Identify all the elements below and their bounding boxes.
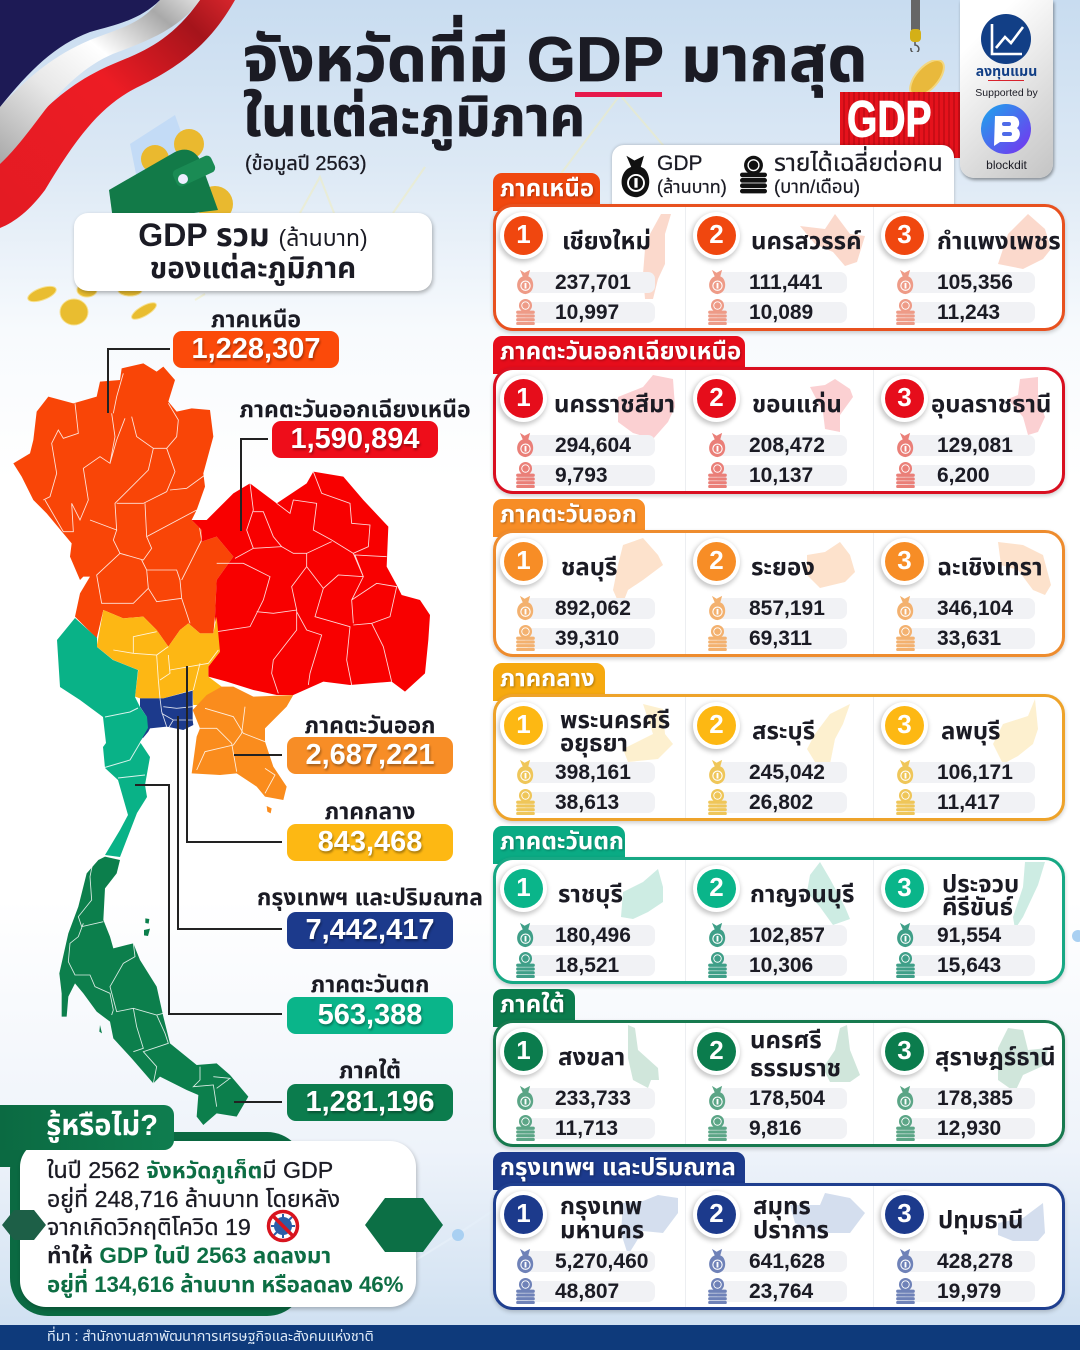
- legend income: รายได้เฉลี่ยต่อคน: [774, 150, 943, 177]
- icon: GDP container: GDP: [847, 92, 932, 148]
- central 1: 1: [516, 709, 531, 739]
- east 3: 3: [897, 545, 912, 575]
- south 3: [873, 1020, 1063, 1147]
- south 1: สงขลา: [558, 1044, 625, 1071]
- frame: [10, 1132, 305, 1316]
- connector: west: [130, 780, 284, 1018]
- icon: crane hook: [905, 0, 927, 52]
- northeast 2: 2: [709, 382, 724, 412]
- north 1: 1: [516, 219, 531, 249]
- east 1: ชลบุรี: [561, 554, 617, 581]
- supported by: Supported by: [975, 87, 1038, 99]
- connector: north: [100, 340, 175, 420]
- Bangkok 3: [873, 1183, 1063, 1310]
- south 2: ธรรมราช: [750, 1055, 841, 1082]
- did you know text: อยู่ที่ 248,716 ล้านบาท โดยหลัง: [47, 1186, 340, 1212]
- map: west region: [57, 618, 150, 857]
- map: south region: [59, 857, 248, 1125]
- Bangkok 3: 19,979: [937, 1280, 1001, 1303]
- west 2: 2: [709, 872, 724, 902]
- south 2: 2: [709, 1035, 724, 1065]
- title: [243, 20, 883, 142]
- central 2: [685, 694, 875, 821]
- label: Bangkok GDP: กรุงเทพฯ และปริมณฑล: [257, 884, 483, 910]
- central 1: อยุธยา: [560, 730, 628, 757]
- label: south GDP: [250, 1058, 490, 1120]
- did you know text: [47, 1156, 412, 1302]
- north 2: นครสวรรค์: [751, 228, 862, 255]
- icon: legend bag: [620, 154, 652, 199]
- panel: south: [493, 1020, 1065, 1147]
- icon: right hexagon: [365, 1190, 443, 1260]
- central 2: สระบุรี: [752, 718, 815, 745]
- south 2: 9,816: [749, 1117, 802, 1140]
- west 3: คีรีขันธ์: [942, 894, 1013, 921]
- Bangkok 2: 641,628: [749, 1250, 825, 1273]
- Bangkok 1: 5,270,460: [555, 1250, 648, 1273]
- northeast 1: นครราชสีมา: [554, 391, 675, 418]
- connector: central: [180, 660, 284, 846]
- tab: Bangkok: กรุงเทพฯ และปริมณฑล: [500, 1154, 736, 1181]
- panel: east: [493, 530, 1065, 657]
- northeast 1: 9,793: [555, 464, 608, 487]
- north 2: 111,441: [749, 271, 823, 294]
- label: northeast GDP: 1,590,894: [290, 423, 420, 455]
- west 3: 91,554: [937, 924, 1001, 947]
- west 1: 18,521: [555, 954, 619, 977]
- south 1: 233,733: [555, 1087, 631, 1110]
- icon: gold coin: [905, 60, 949, 96]
- label: north GDP: ภาคเหนือ: [211, 306, 301, 332]
- west 3: ประจวบ: [942, 871, 1019, 898]
- label: central GDP: ภาคกลาง: [325, 798, 415, 824]
- tab: north: [493, 173, 600, 211]
- northeast 3: 6,200: [937, 464, 990, 487]
- central 2: 2: [709, 709, 724, 739]
- legend: [612, 145, 954, 207]
- panel: did you know: [0, 1105, 445, 1317]
- tab: northeast: ภาคตะวันออกเฉียงเหนือ: [500, 338, 741, 365]
- connector: northeast: [235, 430, 275, 535]
- west 1: ราชบุรี: [558, 881, 623, 908]
- Bangkok 1: กรุงเทพ: [560, 1193, 642, 1220]
- footer bar: [0, 1325, 1080, 1350]
- title underline: [575, 92, 662, 97]
- tab: west: [493, 826, 625, 864]
- connector: east: [232, 750, 284, 760]
- label: west GDP: [250, 972, 490, 1033]
- Bangkok 3: 3: [897, 1198, 912, 1228]
- central 1: พระนครศรี: [560, 707, 670, 734]
- map: north region: [13, 363, 233, 647]
- icon: hexagon shadow: [395, 1185, 429, 1265]
- east 3: 346,104: [937, 597, 1013, 620]
- northeast 2: ขอนแก่น: [752, 391, 842, 418]
- east 2: 2: [709, 545, 724, 575]
- Bangkok 1: 1: [516, 1198, 531, 1228]
- east 3: [873, 530, 1063, 657]
- left band: [0, 1135, 30, 1167]
- logo underline: [988, 80, 1024, 81]
- south 3: สุราษฎร์ธานี: [935, 1044, 1056, 1071]
- central 3: 106,171: [937, 761, 1013, 784]
- panel: Bangkok: [493, 1183, 1065, 1310]
- title: จังหวัดที่มี GDP มากสุด: [243, 25, 868, 95]
- tab: east: [493, 499, 645, 537]
- label: west GDP: 563,388: [318, 999, 422, 1031]
- did you know text: ในปี 2562 จังหวัดภูเก็ตมี GDP: [47, 1157, 333, 1183]
- label: northeast GDP: ภาคตะวันออกเฉียงเหนือ: [239, 396, 471, 422]
- north 3: 105,356: [937, 271, 1013, 294]
- northeast 1: 1: [516, 382, 531, 412]
- south 1: 11,713: [555, 1117, 618, 1140]
- tab: did you know: รู้หรือไม่?: [46, 1110, 158, 1142]
- flag: [0, 0, 240, 230]
- south 2: นครศรี: [750, 1027, 822, 1054]
- title: ในแต่ละภูมิภาค: [243, 86, 585, 148]
- tab: Bangkok: [493, 1152, 745, 1190]
- tab: did you know: [0, 1105, 174, 1150]
- west 1: 180,496: [555, 924, 631, 947]
- north 3: [873, 204, 1063, 331]
- central 1: 398,161: [555, 761, 631, 784]
- south 1: 1: [516, 1035, 531, 1065]
- label: west GDP: ภาคตะวันตก: [311, 971, 429, 997]
- Bangkok 3: 428,278: [937, 1250, 1013, 1273]
- central 1: 38,613: [555, 791, 619, 814]
- west 1: [493, 857, 683, 984]
- north 2: [685, 204, 875, 331]
- central 3: 3: [897, 709, 912, 739]
- south 1: [493, 1020, 683, 1147]
- legend unit: (บาท/เดือน): [774, 176, 860, 197]
- icon: falling coins: [25, 280, 160, 340]
- northeast 1: [493, 367, 683, 494]
- label: central GDP: [250, 799, 490, 860]
- connector: south: [232, 1097, 284, 1107]
- northeast 2: [685, 367, 875, 494]
- logo name: ลงทุนแมน: [976, 63, 1037, 79]
- central 2: 26,802: [749, 791, 813, 814]
- tab: northeast: [493, 336, 745, 374]
- central 3: [873, 694, 1063, 821]
- subtitle: (ข้อมูลปี 2563): [245, 153, 367, 175]
- west 3: [873, 857, 1063, 984]
- west 2: [685, 857, 875, 984]
- label: south GDP: 1,281,196: [305, 1086, 434, 1118]
- northeast 3: [873, 367, 1063, 494]
- Bangkok 1: มหานคร: [560, 1217, 644, 1244]
- label: north GDP: [136, 307, 376, 367]
- icon: wallet: [105, 112, 235, 217]
- central 3: 11,417: [937, 791, 1000, 814]
- east 2: 69,311: [749, 627, 812, 650]
- northeast 1: 294,604: [555, 434, 631, 457]
- did you know text: อยู่ที่ 134,616 ล้านบาท หรือลดลง 46%: [47, 1272, 403, 1297]
- Bangkok 2: ปราการ: [753, 1217, 829, 1244]
- panel: west: [493, 857, 1065, 984]
- label: Bangkok GDP: 7,442,417: [305, 914, 434, 946]
- icon: logo chart: [981, 14, 1031, 64]
- north 2: 10,089: [749, 301, 813, 324]
- north 1: 10,997: [555, 301, 619, 324]
- northeast 3: 129,081: [937, 434, 1013, 457]
- north 3: 3: [897, 219, 912, 249]
- east 2: 857,191: [749, 597, 825, 620]
- did you know text: ทำให้ GDP ในปี 2563 ลดลงมา: [47, 1243, 331, 1268]
- west 2: 10,306: [749, 954, 813, 977]
- tab: south: [493, 989, 575, 1027]
- west 2: กาญจนบุรี: [750, 881, 854, 908]
- central 3: ลพบุรี: [941, 718, 1000, 745]
- map: Bangkok region: [140, 691, 193, 742]
- west 3: 15,643: [937, 954, 1001, 977]
- label: south GDP: ภาคใต้: [339, 1057, 401, 1083]
- south 3: 12,930: [937, 1117, 1001, 1140]
- tab: east: ภาคตะวันออก: [500, 501, 637, 528]
- label: northeast GDP: [235, 397, 475, 458]
- north 3: กำแพงเพชร: [937, 228, 1061, 255]
- south 3: 178,385: [937, 1087, 1013, 1110]
- northeast 3: อุบลราชธานี: [931, 391, 1051, 418]
- northeast 2: 208,472: [749, 434, 825, 457]
- south 3: 3: [897, 1035, 912, 1065]
- legend GDP: GDP: [657, 152, 703, 175]
- white box: [20, 1141, 416, 1307]
- label: north GDP: 1,228,307: [191, 333, 320, 365]
- map: central region: [97, 610, 222, 705]
- map of Thailand: [0, 0, 480, 1130]
- panel: GDP total heading: ของแต่ละภูมิภาค: [150, 252, 356, 285]
- north 2: 2: [709, 219, 724, 249]
- Bangkok 2: 2: [709, 1198, 724, 1228]
- east 1: 39,310: [555, 627, 619, 650]
- icon: GDP container: [840, 92, 960, 158]
- Bangkok 2: สมุทร: [753, 1193, 811, 1220]
- did you know text: จากเกิดวิกฤติโควิด 19: [47, 1214, 251, 1240]
- Bangkok 1: [493, 1183, 683, 1310]
- icon: blockdit logo: [980, 103, 1032, 155]
- east 3: ฉะเชิงเทรา: [937, 554, 1043, 581]
- panel: GDP total heading: [74, 213, 432, 291]
- panel: central: [493, 694, 1065, 821]
- north 1: เชียงใหม่: [562, 228, 651, 255]
- logo card: [960, 0, 1053, 178]
- icon: legend coins: [740, 154, 767, 198]
- east 1: [493, 530, 683, 657]
- west 3: 3: [897, 872, 912, 902]
- tab: west: ภาคตะวันตก: [500, 828, 624, 855]
- icon: left hexagon: [2, 1208, 46, 1242]
- north 1: [493, 204, 683, 331]
- blockdit name: blockdit: [986, 158, 1027, 172]
- north 3: 11,243: [937, 301, 1000, 324]
- icon: covid prohibited: [266, 1209, 300, 1243]
- panel: northeast: [493, 367, 1065, 494]
- legend million baht: (ล้านบาท): [657, 177, 727, 197]
- northeast 3: 3: [897, 382, 912, 412]
- Bangkok 3: ปทุมธานี: [938, 1207, 1024, 1234]
- map: east region: [192, 687, 293, 813]
- central 1: [493, 694, 683, 821]
- label: east GDP: 2,687,221: [305, 739, 434, 771]
- north 1: 237,701: [555, 271, 631, 294]
- northeast 2: 10,137: [749, 464, 813, 487]
- label: east GDP: ภาคตะวันออก: [304, 712, 436, 738]
- east 1: 1: [516, 545, 531, 575]
- Bangkok 2: [685, 1183, 875, 1310]
- label: central GDP: 843,468: [318, 826, 422, 858]
- west 1: 1: [516, 872, 531, 902]
- central 2: 245,042: [749, 761, 825, 784]
- label: east GDP: [250, 713, 490, 773]
- tab: north: ภาคเหนือ: [500, 175, 594, 202]
- east 2: [685, 530, 875, 657]
- tab: south: ภาคใต้: [500, 991, 565, 1018]
- tab: central: ภาคกลาง: [500, 665, 595, 692]
- connector: Bangkok: [172, 712, 284, 934]
- footer bar: ที่มา : สำนักงานสภาพัฒนาการเศรษฐกิจและสังคมแห่งชาติ: [47, 1329, 374, 1345]
- east 2: ระยอง: [751, 554, 815, 581]
- map: northeast region: [192, 472, 430, 695]
- south 2: 178,504: [749, 1087, 825, 1110]
- east 1: 892,062: [555, 597, 631, 620]
- west 2: 102,857: [749, 924, 825, 947]
- Bangkok 2: 23,764: [749, 1280, 813, 1303]
- south 2: [685, 1020, 875, 1147]
- label: Bangkok GDP: [250, 885, 490, 948]
- Bangkok 1: 48,807: [555, 1280, 619, 1303]
- east 3: 33,631: [937, 627, 1001, 650]
- panel: north: [493, 204, 1065, 331]
- panel: GDP total heading: GDP รวม (ล้านบาท): [138, 217, 368, 253]
- tab: central: [493, 663, 605, 701]
